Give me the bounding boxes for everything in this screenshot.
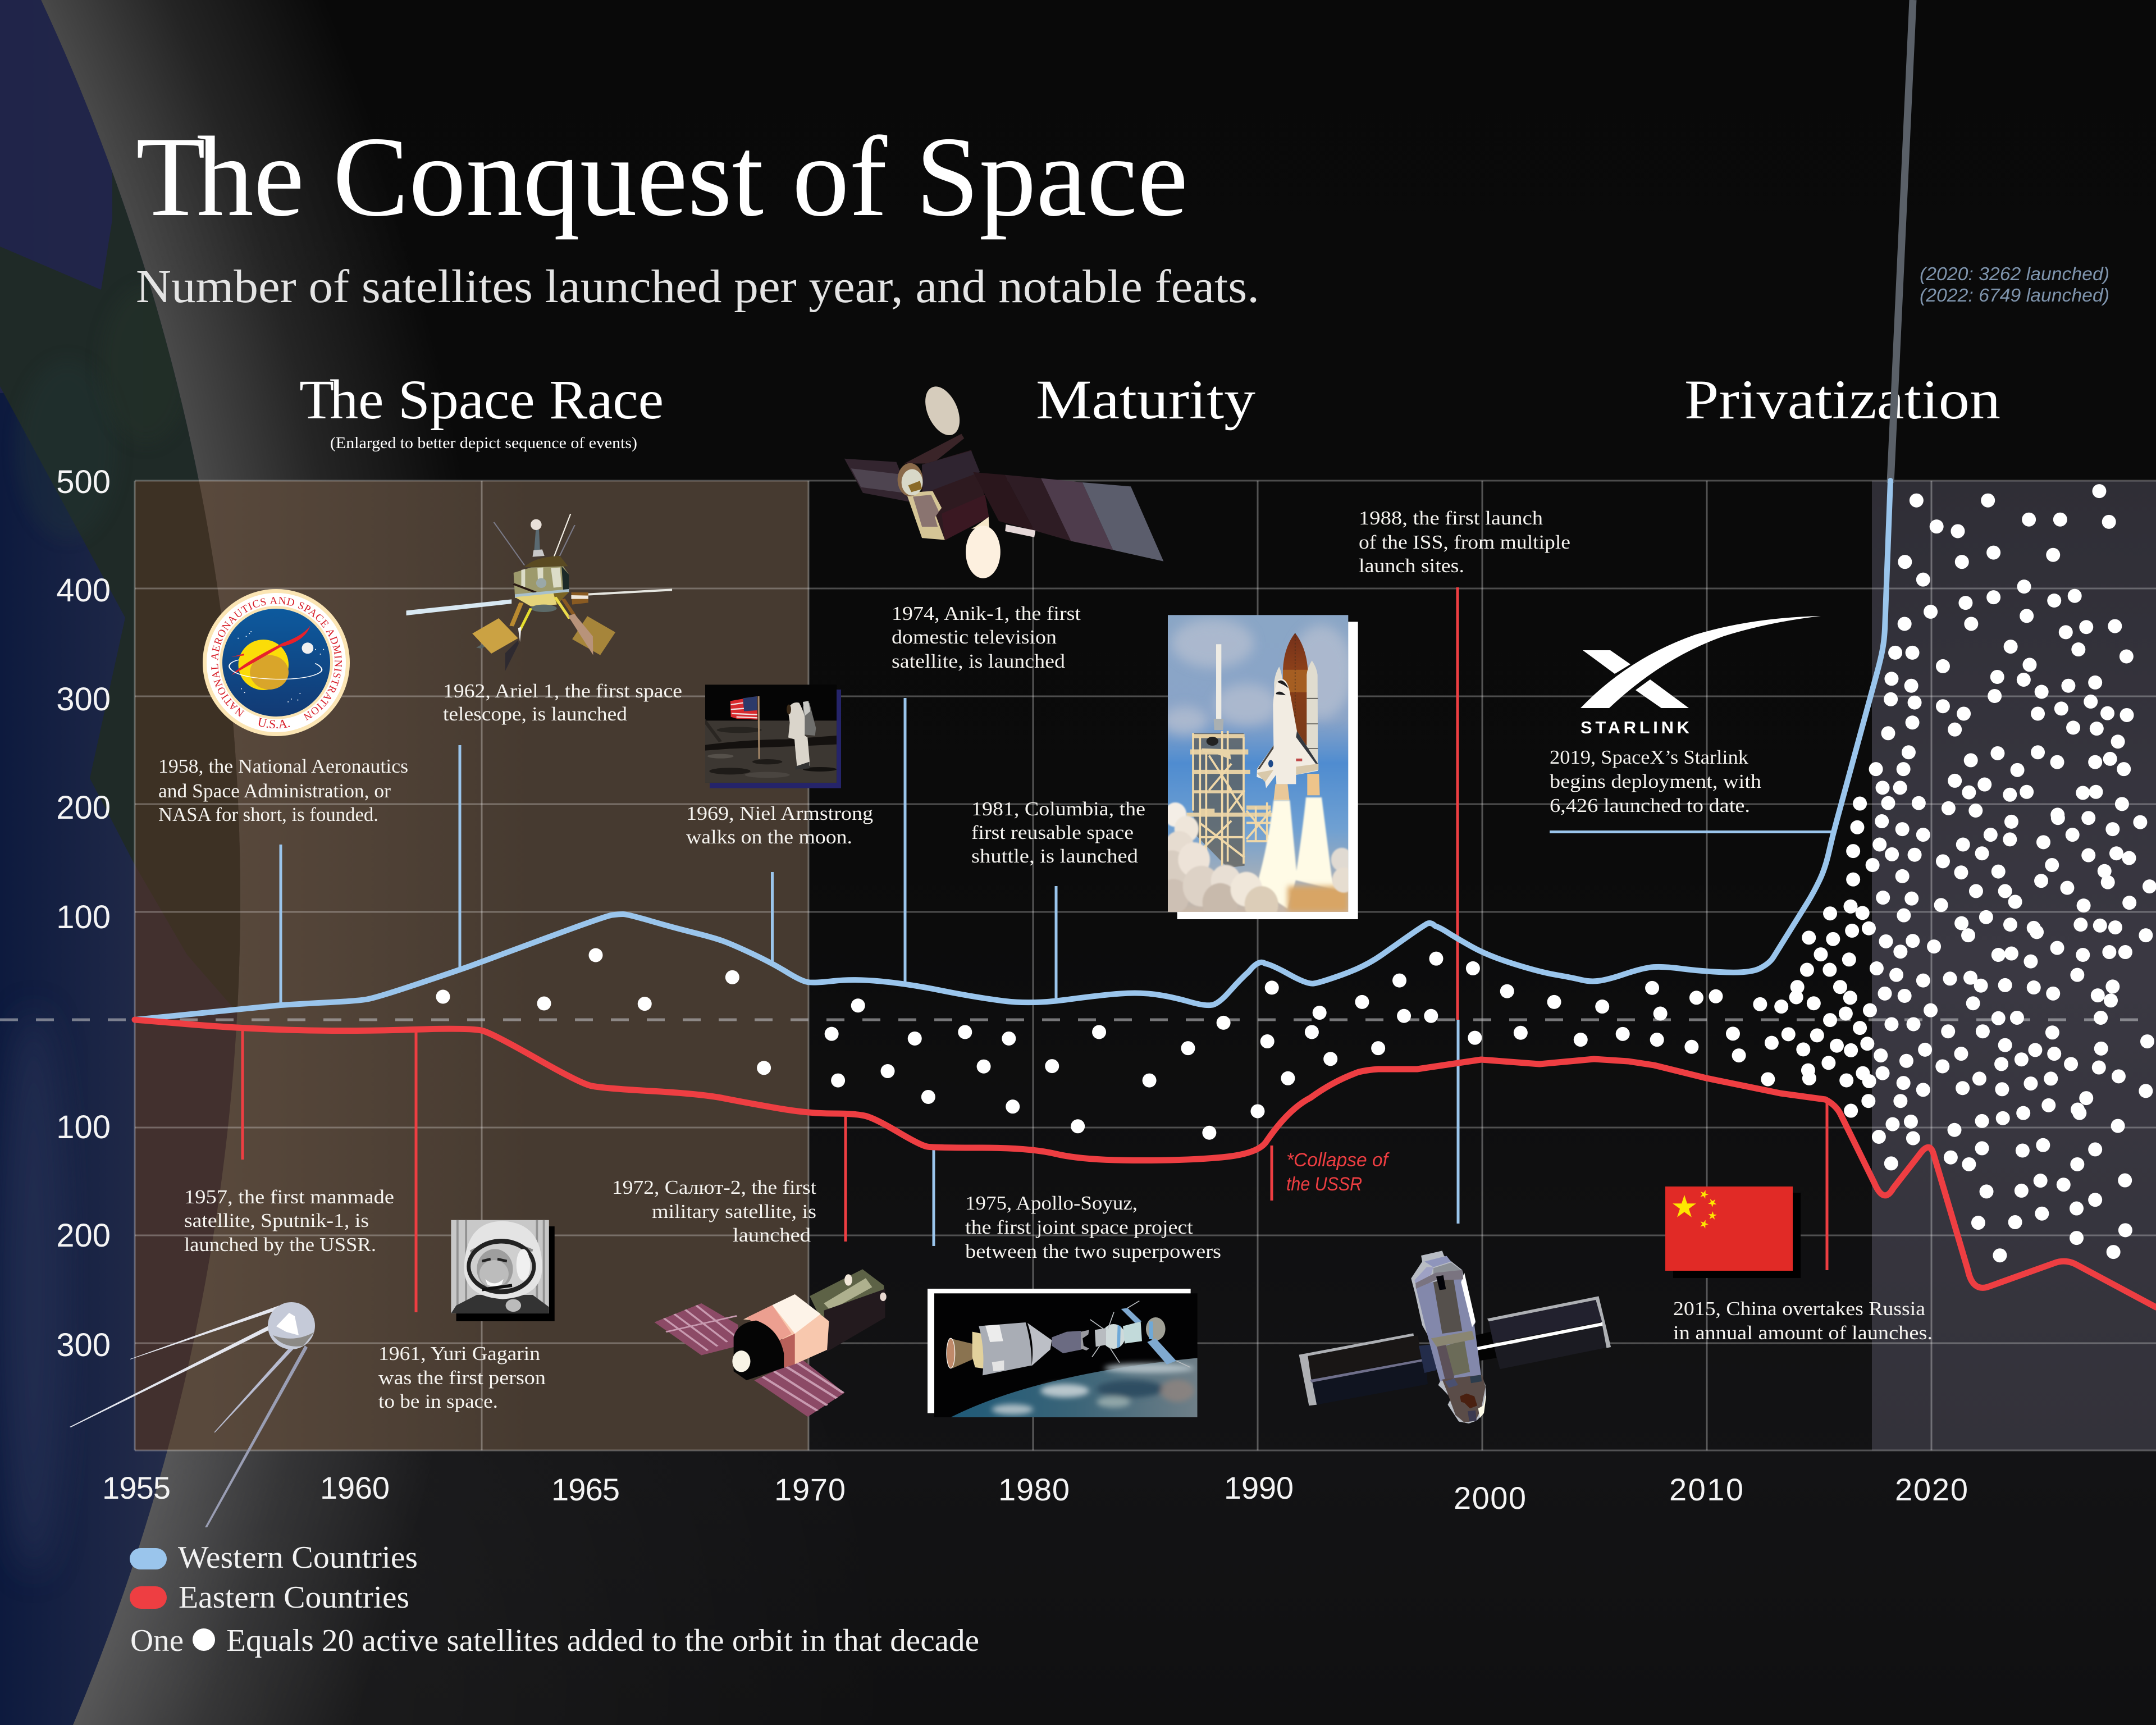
off-chart launch counts note: (2020: 3262 launched) — [1920, 263, 2109, 284]
callout: 1974 Anik-1: satellite, is launched — [892, 650, 1066, 672]
callout: 2015 China — [1673, 1298, 1933, 1344]
callout: 1972 Salyut-2: 1972, Салют-2, the first — [612, 1176, 816, 1198]
callout: 1988 ISS: launch sites. — [1359, 555, 1464, 577]
heading: maturity: Maturity — [1036, 368, 1255, 431]
legend: dot scale: One — [130, 1623, 184, 1658]
callout: 1962 Ariel 1: 1962, Ariel 1, the first space — [443, 680, 682, 702]
shuttle flames and smoke — [1256, 797, 1336, 909]
callout: 1972 Salyut-2 — [612, 1176, 816, 1246]
off-chart launch counts note: (2022: 6749 launched) — [1920, 285, 2109, 305]
callout: 1974 Anik-1 — [892, 603, 1081, 672]
callout: collapse of the USSR: *Collapse of — [1286, 1149, 1390, 1171]
y axis labels: 100 — [56, 899, 111, 935]
legend: dot scale: Equals 20 active satellites added to the orbit in that decade — [226, 1623, 979, 1658]
y axis labels: 400 — [56, 572, 111, 609]
flag: China — [1665, 1186, 1801, 1278]
heading: privatization: Privatization — [1684, 368, 2000, 431]
callout: 1958 NASA: NASA for short, is founded. — [158, 804, 378, 825]
line: eastern countries launches — [135, 1020, 2156, 1307]
callout: 1961 Gagarin: to be in space. — [378, 1390, 498, 1412]
y axis labels: 300 — [56, 1327, 111, 1363]
callout: 1957 Sputnik: 1957, the first manmade — [184, 1186, 394, 1208]
callout stems — [243, 587, 1835, 1312]
callout: 1957 Sputnik: satellite, Sputnik-1, is — [184, 1210, 369, 1231]
icon: NASA logo — [203, 589, 350, 736]
off-chart launch counts note — [1920, 263, 2109, 305]
callout: 1981 Columbia: 1981, Columbia, the — [971, 798, 1145, 820]
callout: 1969 Armstrong — [686, 802, 873, 848]
y axis labels — [56, 464, 111, 1363]
callout: 2019 Starlink — [1550, 746, 1762, 816]
callout: 2019 Starlink: 6,426 launched to date. — [1550, 795, 1750, 816]
callout: 1974 Anik-1: domestic television — [892, 626, 1057, 648]
callout: 1988 ISS: of the ISS, from multiple — [1359, 531, 1570, 553]
satellite dots: one dot equals 20 satellites — [443, 491, 2149, 1256]
callout: 1958 NASA — [158, 755, 408, 825]
x axis labels — [102, 1470, 1968, 1516]
callout: 1961 Gagarin — [378, 1343, 546, 1412]
callout: 1957 Sputnik — [184, 1186, 394, 1256]
callout: 2019 Starlink: 2019, SpaceX’s Starlink — [1550, 746, 1749, 768]
photo: Yuri Gagarin — [451, 1220, 555, 1321]
planet earth — [0, 0, 199, 1725]
callout: 1962 Ariel 1: telescope, is launched — [443, 703, 628, 725]
y axis labels: 100 — [56, 1109, 111, 1146]
callout: 1969 Armstrong: walks on the moon. — [686, 826, 852, 848]
legend: eastern countries: Eastern Countries — [179, 1580, 409, 1615]
x axis labels: 1965 — [551, 1472, 620, 1507]
line: western countries launches — [135, 481, 1890, 1020]
callout: 1962 Ariel 1 — [443, 680, 682, 725]
x axis labels: 1960 — [320, 1470, 390, 1505]
y axis labels: 200 — [56, 1217, 111, 1254]
callout: 1988 ISS: 1988, the first launch — [1359, 507, 1543, 529]
callout: 1958 NASA: and Space Administration, or — [158, 780, 391, 802]
callout: 1981 Columbia: first reusable space — [971, 822, 1134, 843]
y axis labels: 300 — [56, 681, 111, 718]
icon: Salyut-2 satellite — [654, 1269, 887, 1417]
callout: 1969 Armstrong: 1969, Niel Armstrong — [686, 802, 873, 824]
x axis labels: 1955 — [102, 1470, 171, 1505]
x axis labels: 2020 — [1895, 1472, 1968, 1507]
x axis labels: 2010 — [1669, 1472, 1743, 1507]
logo: Starlink: STARLINK — [1581, 718, 1690, 737]
callout: 1975 Apollo-Soyuz: between the two superpowers — [965, 1240, 1221, 1262]
chart grid — [135, 481, 2156, 1450]
callout: collapse of the USSR — [1286, 1149, 1390, 1195]
icon: space station — [1299, 1251, 1611, 1423]
callout: 1981 Columbia — [971, 798, 1145, 867]
note: enlarged scale: (Enlarged to better depict sequence of events) — [330, 435, 637, 452]
legend — [130, 1540, 979, 1658]
NASA logo lettering: U.S.A. — [258, 718, 290, 729]
zero line — [0, 1019, 2156, 1021]
callout: 1957 Sputnik: launched by the USSR. — [184, 1234, 376, 1256]
callout: 1961 Gagarin: was the first person — [378, 1367, 546, 1389]
title: The Conquest of Space — [136, 113, 1188, 240]
callout: 1958 NASA: 1958, the National Aeronautics — [158, 755, 408, 777]
logo: Starlink — [1581, 616, 1821, 737]
callout: 1975 Apollo-Soyuz — [965, 1192, 1221, 1262]
photo: moon landing — [705, 684, 841, 788]
callout: 2015 China: in annual amount of launches. — [1673, 1322, 1933, 1344]
photo: shuttle launch — [1154, 615, 1358, 923]
icon: Sputnik-1 — [70, 1302, 315, 1527]
shuttle stack — [1257, 633, 1320, 800]
callout: 1981 Columbia: shuttle, is launched — [971, 845, 1139, 867]
x axis labels: 1990 — [1224, 1470, 1294, 1505]
x axis labels: 1970 — [774, 1472, 846, 1507]
heading: the space race: The Space Race — [299, 368, 664, 431]
callout: 1961 Gagarin: 1961, Yuri Gagarin — [378, 1343, 540, 1365]
callout: collapse of the USSR: the USSR — [1286, 1174, 1362, 1195]
icon: Anik-1 satellite — [844, 382, 1163, 578]
subtitle: Number of satellites launched per year, and notable feats. — [136, 261, 1259, 313]
icon: Ariel 1 satellite — [406, 514, 672, 671]
callout: 2015 China: 2015, China overtakes Russia — [1673, 1298, 1925, 1320]
callout: 1975 Apollo-Soyuz: 1975, Apollo-Soyuz, — [965, 1192, 1138, 1214]
callout: 1974 Anik-1: 1974, Anik-1, the first — [892, 603, 1081, 624]
photo: Apollo-Soyuz — [928, 1289, 1198, 1417]
x axis labels: 1980 — [998, 1472, 1070, 1507]
y axis labels: 500 — [56, 464, 111, 500]
callout: 1972 Salyut-2: military satellite, is — [652, 1201, 816, 1222]
callout: 2019 Starlink: begins deployment, with — [1550, 770, 1762, 792]
callout: 1972 Salyut-2: launched — [733, 1224, 811, 1246]
legend: western countries: Western Countries — [178, 1540, 418, 1575]
off-chart spike line — [1890, 0, 1913, 483]
NASA logo lettering: NATIONAL AERONAUTICS AND SPACE ADMINISTRATION — [211, 597, 342, 721]
x axis labels: 2000 — [1454, 1480, 1526, 1516]
panel: the space race background — [125, 481, 808, 1450]
panel: privatization background — [1872, 481, 2156, 1450]
y axis labels: 200 — [56, 790, 111, 826]
shuttle photo clouds — [1162, 619, 1353, 735]
callout: 1988 ISS — [1359, 507, 1570, 577]
callout: 1975 Apollo-Soyuz: the first joint space project — [965, 1216, 1193, 1238]
